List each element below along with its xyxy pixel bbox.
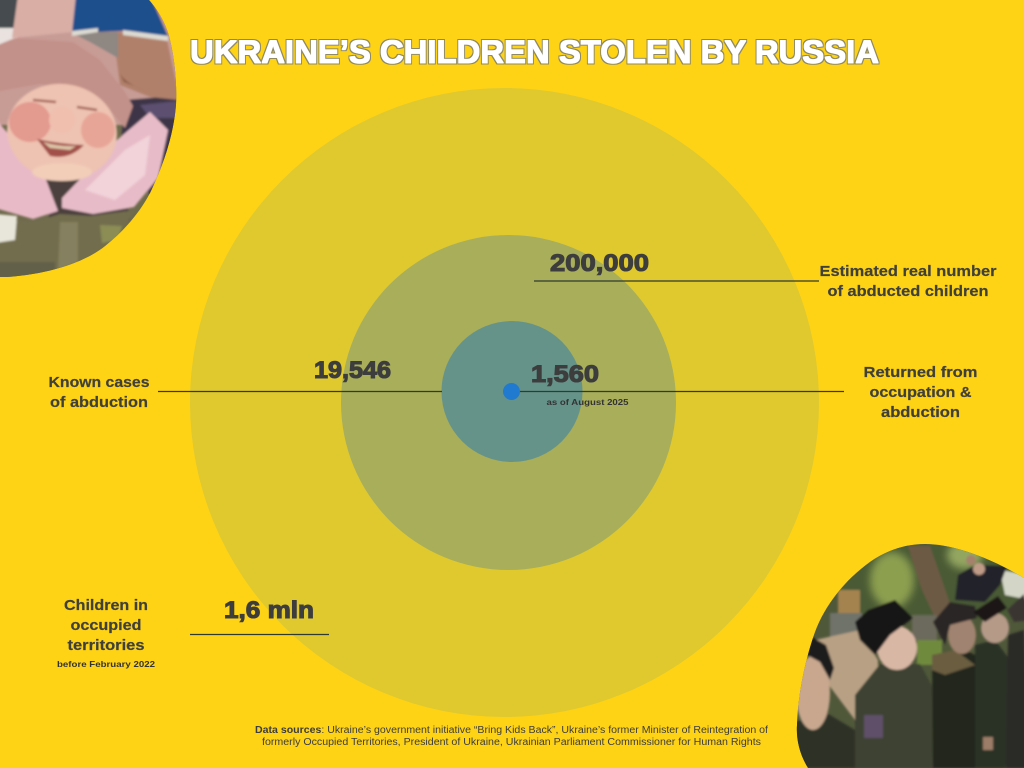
data sources: Data sources : Ukraine’s government initiative “Bring Kids Back”, Ukraine’s former Minister of Reintegration of	[255, 725, 768, 736]
circle: estimated real number	[341, 235, 676, 570]
concentric circles chart	[190, 88, 819, 717]
data sources	[255, 725, 768, 748]
line: 200,000	[534, 280, 819, 282]
label: known cases	[48, 374, 150, 411]
number: 19,546: 19,546	[314, 357, 391, 384]
coat	[0, 210, 130, 270]
dark gap under chin	[46, 180, 129, 218]
label: children in occupied territories	[57, 597, 155, 669]
photo: children in cadet uniforms	[790, 540, 1024, 768]
label: returned	[864, 364, 978, 421]
child three	[930, 652, 976, 768]
badge	[0, 214, 17, 243]
foliage	[840, 545, 1024, 620]
dark scarf and coat right	[120, 96, 176, 195]
label: estimated real number: of abducted children	[828, 283, 988, 300]
label: children in occupied territories: territories	[68, 637, 144, 654]
label: children in occupied territories: Children in	[64, 597, 148, 614]
label: returned: occupation &	[870, 384, 972, 401]
photo: crying child in pink hat	[0, 0, 185, 285]
child two	[854, 663, 934, 768]
child left	[796, 714, 856, 768]
fur left	[0, 118, 58, 219]
label: returned: Returned from	[864, 364, 978, 381]
background figure and bench	[838, 590, 860, 615]
label: known cases: of abduction	[50, 394, 148, 411]
number: 200,000: 200,000	[550, 250, 649, 277]
child five	[1006, 630, 1024, 768]
label: estimated real number	[820, 263, 997, 300]
circle: children in occupied territories	[190, 88, 819, 717]
hat top	[12, 0, 80, 38]
leader lines	[158, 281, 844, 634]
label: children in occupied territories: occupied	[70, 617, 142, 634]
number: 1,560: 1,560	[531, 361, 599, 388]
label: returned: abduction	[881, 404, 960, 421]
label: known cases: Known cases	[48, 374, 150, 391]
line: returned	[520, 390, 844, 392]
hat band	[0, 38, 133, 128]
circle: known cases	[442, 321, 582, 462]
adults behind	[955, 565, 1007, 602]
note: as of August 2025: as of August 2025	[546, 397, 629, 407]
gravel mound	[815, 630, 878, 730]
line: 1,6 mln	[190, 634, 329, 636]
child face	[6, 82, 118, 172]
hooded adult	[116, 31, 176, 102]
number: 1,6 mln: 1,6 mln	[224, 597, 314, 624]
title: UKRAINE’S CHILDREN STOLEN BY RUSSIA	[190, 34, 879, 70]
line: known cases	[158, 390, 442, 392]
fur right	[62, 112, 168, 214]
label: children in occupied territories: before February 2022	[57, 659, 155, 669]
child four	[974, 642, 1008, 768]
tree trunk	[908, 546, 953, 622]
center dot	[503, 383, 520, 400]
label: estimated real number: Estimated real number	[820, 263, 997, 280]
data sources: formerly Occupied Territories, President of Ukraine, Ukrainian Parliament Commissioner for Human Rights	[262, 737, 761, 748]
